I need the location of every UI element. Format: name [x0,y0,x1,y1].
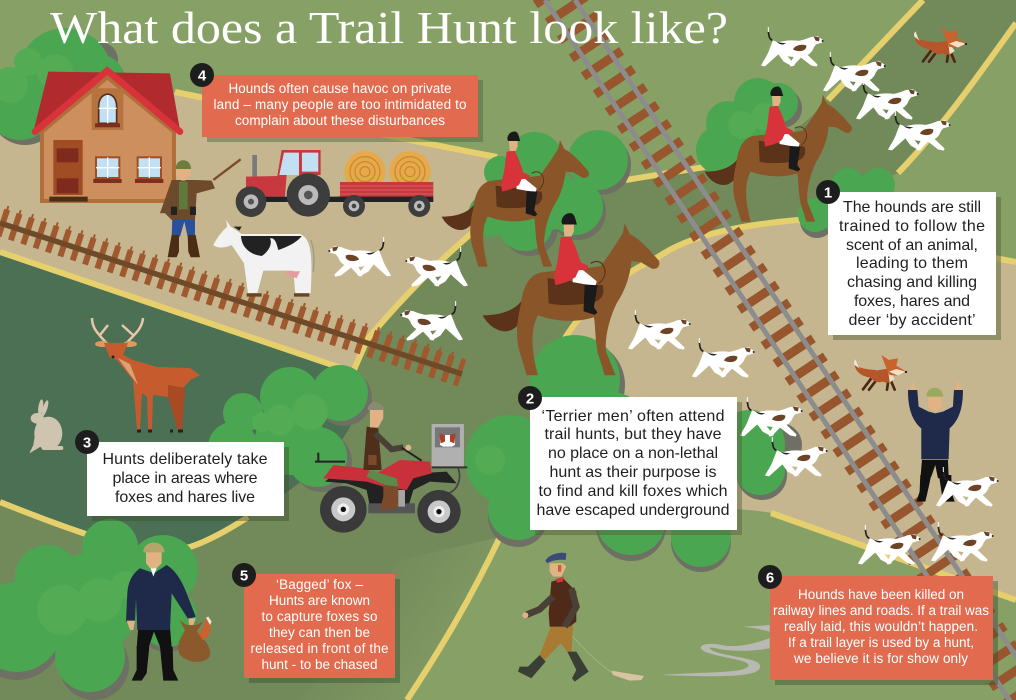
tractor and hay trailer [236,150,433,217]
quad bike with terrier man [315,402,467,533]
callout 6: hounds killed on railways: really laid, this wouldn’t happen. [784,619,978,634]
callout 6: hounds killed on railways: 6 [766,570,774,586]
callout 2: terrier men: no place on a non-lethal [548,445,718,462]
callout 5: bagged fox: released in front of the [250,641,388,656]
callout 6: hounds killed on railways [758,565,998,685]
callout 2: terrier men: have escaped underground [536,502,730,519]
callout 4: havoc on private land: Hounds often cause havoc on private [228,81,452,96]
callout 4: havoc on private land: land – many people are too intimidated to [214,97,466,112]
second hound in front of man [936,467,999,507]
callout 2: terrier men [518,386,742,535]
callout 1: hounds trained to follow scent: foxes, hares and [854,293,970,310]
farmer waving stick [160,159,241,257]
title: What does a Trail Hunt look like? [50,2,728,53]
railway track [540,0,1016,700]
callout 2: terrier men: hunt as their purpose is [550,464,716,481]
riders on horses [442,87,852,375]
callout 5: bagged fox: 5 [240,568,248,584]
callout 2: terrier men: ‘Terrier men’ often attend [542,408,724,425]
callout 5: bagged fox: hunt - to be chased [262,657,378,672]
callout 6: hounds killed on railways: If a trail layer is used by a hunt, [788,635,974,650]
callout 2: terrier men: trail hunts, but they have [544,426,722,443]
callout 2: terrier men: 2 [526,390,534,408]
callout 5: bagged fox [232,563,400,683]
callout 3: where foxes and hares live: foxes and hares live [115,489,255,506]
stag [92,318,200,431]
trail layer walking [518,553,644,682]
callout 6: hounds killed on railways: Hounds have been killed on [798,587,964,602]
callout 1: hounds trained to follow scent [816,180,1001,340]
callout 3: where foxes and hares live: Hunts deliberately take [102,451,268,468]
callout 4: havoc on private land: complain about these disturbances [235,113,445,128]
callout 5: bagged fox: to capture foxes so [262,609,378,624]
callout 2: terrier men: to find and kill foxes which [538,483,728,500]
cow [213,220,314,295]
farmhouse [33,71,180,202]
callout 1: hounds trained to follow scent: leading to them [856,255,968,272]
callout 3: where foxes and hares live [75,430,289,521]
callout 4: havoc on private land [190,63,483,142]
callout 1: hounds trained to follow scent: 1 [824,184,832,202]
callout 6: hounds killed on railways: we believe it is for show only [793,651,968,666]
callout 1: hounds trained to follow scent: scent of an animal, [846,237,978,254]
callout 5: bagged fox: ‘Bagged’ fox – [276,577,363,592]
hounds [328,27,994,565]
man with bagged fox [126,543,212,681]
callout 1: hounds trained to follow scent: The hounds are still [843,199,981,216]
callout 1: hounds trained to follow scent: chasing and killing [847,274,977,291]
callout 5: bagged fox: Hunts are known [269,593,370,608]
callout 4: havoc on private land: 4 [198,68,207,84]
callout 3: where foxes and hares live: 3 [83,434,91,452]
man with raised arms [908,381,963,502]
callout 6: hounds killed on railways: railway lines and roads. If a trail was [773,603,989,618]
wooden fence [0,208,462,374]
callout 3: where foxes and hares live: place in areas where [112,470,258,487]
callout 1: hounds trained to follow scent: deer ‘by accident’ [848,312,976,329]
callout 5: bagged fox: they can then be [269,625,370,640]
foxes [854,27,967,390]
scent trail [661,625,770,676]
callout 1: hounds trained to follow scent: trained to follow the [839,218,985,235]
hare [29,399,63,453]
